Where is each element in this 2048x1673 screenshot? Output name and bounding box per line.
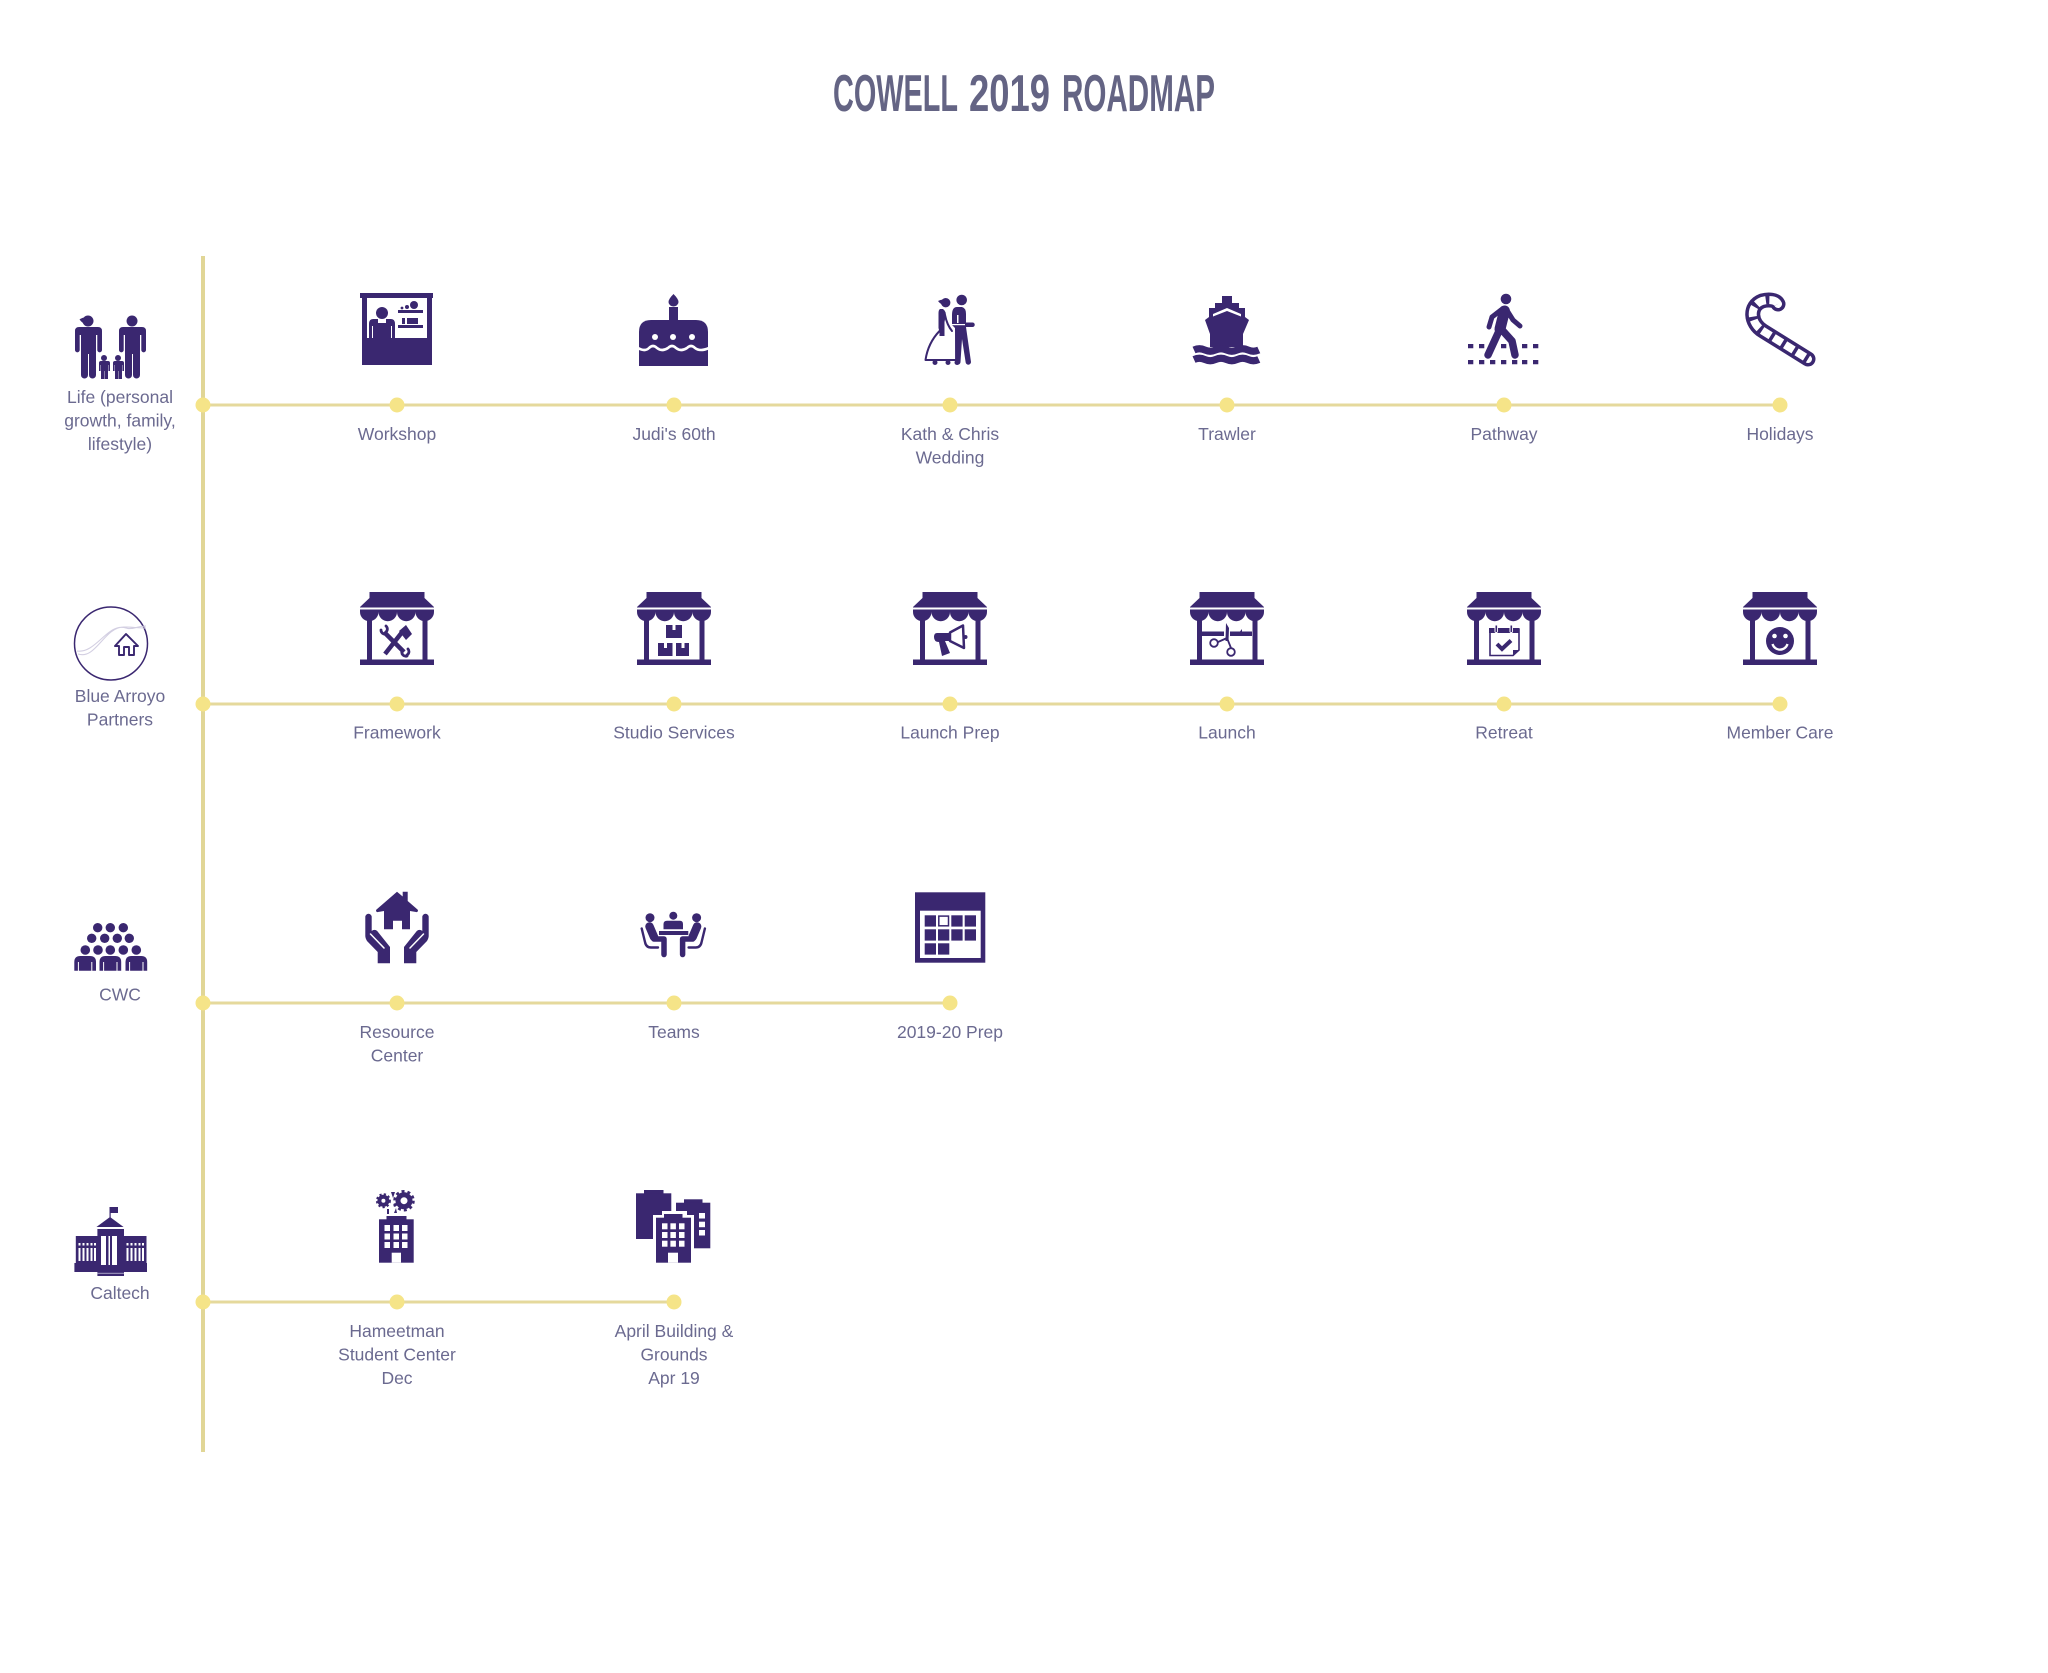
row label: Life: lifestyle)	[88, 434, 152, 454]
icon: birthday cake	[638, 294, 709, 366]
row label: Blue Arroyo Partners: Blue Arroyo	[75, 686, 165, 706]
label: Studio Services: Studio Services	[613, 722, 735, 742]
title: ROADMAP	[1062, 65, 1215, 123]
label: Framework: Framework	[353, 722, 441, 742]
vertical axis line	[201, 256, 205, 1452]
row label: Blue Arroyo Partners: Partners	[87, 710, 153, 730]
label: Workshop: Workshop	[358, 424, 436, 444]
icon: building with gears	[377, 1191, 414, 1263]
label: Launch Prep: Launch Prep	[900, 722, 1000, 742]
label: Kath & Chris Wedding: Wedding	[916, 448, 984, 468]
row: CWC	[74, 892, 1003, 1066]
label: Pathway: Pathway	[1470, 424, 1538, 444]
row label: Life: growth, family,	[64, 410, 176, 430]
icon: store with tools	[360, 592, 434, 665]
label: Member Care: Member Care	[1727, 722, 1833, 742]
row line: CWC	[196, 996, 958, 1010]
label: Trawler: Trawler	[1198, 424, 1256, 444]
icon: wedding couple	[926, 295, 975, 365]
icon: hands holding house	[365, 892, 429, 963]
icon: store with megaphone	[913, 592, 987, 665]
label: Resource Center: Center	[371, 1046, 423, 1066]
label: Kath & Chris Wedding: Kath & Chris	[901, 424, 999, 444]
label: April Building & Grounds Apr 19: Grounds	[640, 1344, 708, 1364]
label: Teams: Teams	[648, 1022, 700, 1042]
row line: Life	[196, 398, 1788, 412]
icon: team around table	[642, 912, 705, 954]
title	[833, 65, 1215, 123]
icon: store with calendar	[1467, 592, 1541, 665]
label: 2019-20 Prep: 2019-20 Prep	[897, 1022, 1003, 1042]
row label: Caltech: Caltech	[90, 1283, 150, 1303]
label: Holidays: Holidays	[1746, 424, 1814, 444]
icon: family	[75, 316, 146, 379]
icon: calendar	[915, 892, 985, 963]
icon: pedestrian on crossing	[1468, 294, 1538, 364]
icon: crowd	[74, 923, 147, 971]
icon: Blue Arroyo logo	[74, 607, 148, 680]
icon: ship	[1194, 296, 1259, 361]
icon: workshop	[360, 293, 433, 365]
row line: Blue Arroyo	[196, 696, 1788, 712]
label: April Building & Grounds Apr 19: Apr 19	[648, 1368, 700, 1388]
label: Launch: Launch	[1198, 722, 1256, 742]
row label: Life: Life (personal	[67, 387, 173, 407]
label: Resource Center: Resource	[360, 1022, 434, 1042]
label: Retreat: Retreat	[1475, 722, 1533, 742]
row line: Caltech	[196, 1294, 682, 1310]
label: April Building & Grounds Apr 19: April Building &	[615, 1321, 734, 1341]
row: Blue Arroyo Partners	[74, 592, 1833, 742]
icon: candy cane	[1753, 300, 1808, 359]
icon: store with smiley	[1743, 592, 1817, 665]
label: Hameetman Student Center Dec: Hameetman	[349, 1321, 445, 1341]
label: Hameetman Student Center Dec: Dec	[381, 1368, 413, 1388]
title: 2019	[969, 65, 1050, 123]
icon: capitol building	[74, 1207, 147, 1276]
label: Judi's 60th: Judi's 60th	[632, 424, 716, 444]
row: Life	[64, 293, 1814, 468]
row label: CWC: CWC	[99, 985, 141, 1005]
row: Caltech	[74, 1190, 734, 1388]
icon: store with boxes	[637, 592, 711, 665]
icon: store with ribbon cutting	[1190, 592, 1264, 665]
label: Hameetman Student Center Dec: Student Center	[338, 1344, 456, 1364]
icon: campus buildings	[636, 1190, 710, 1263]
title: COWELL	[833, 65, 958, 123]
